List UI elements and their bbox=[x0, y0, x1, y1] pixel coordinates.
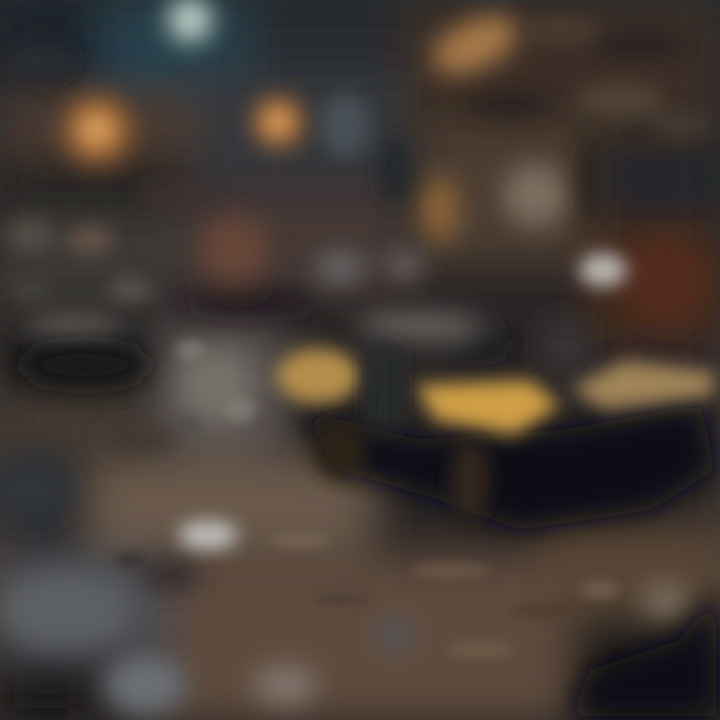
light: warm upper right glow bbox=[422, 4, 567, 244]
floor: debris and highlights bbox=[0, 349, 689, 717]
object: dark bottom right foreground bbox=[570, 590, 716, 716]
car: yellow body panels bbox=[276, 348, 716, 435]
object: white paper on floor bbox=[178, 520, 238, 550]
light: orange lamp centre bbox=[238, 82, 318, 162]
object: dark shapes left bbox=[0, 345, 151, 520]
background shelves mottling bbox=[6, 16, 710, 302]
car: dark lower body bbox=[300, 405, 716, 530]
car: dark centre pillar bbox=[314, 345, 490, 520]
object: white highlight right bbox=[579, 253, 627, 287]
light: white lamp at top bbox=[150, 0, 230, 60]
background objects bbox=[25, 216, 705, 340]
car: top windscreen bbox=[358, 313, 585, 370]
light: orange lamp left bbox=[45, 78, 149, 182]
floor: mottled texture bbox=[112, 340, 620, 659]
